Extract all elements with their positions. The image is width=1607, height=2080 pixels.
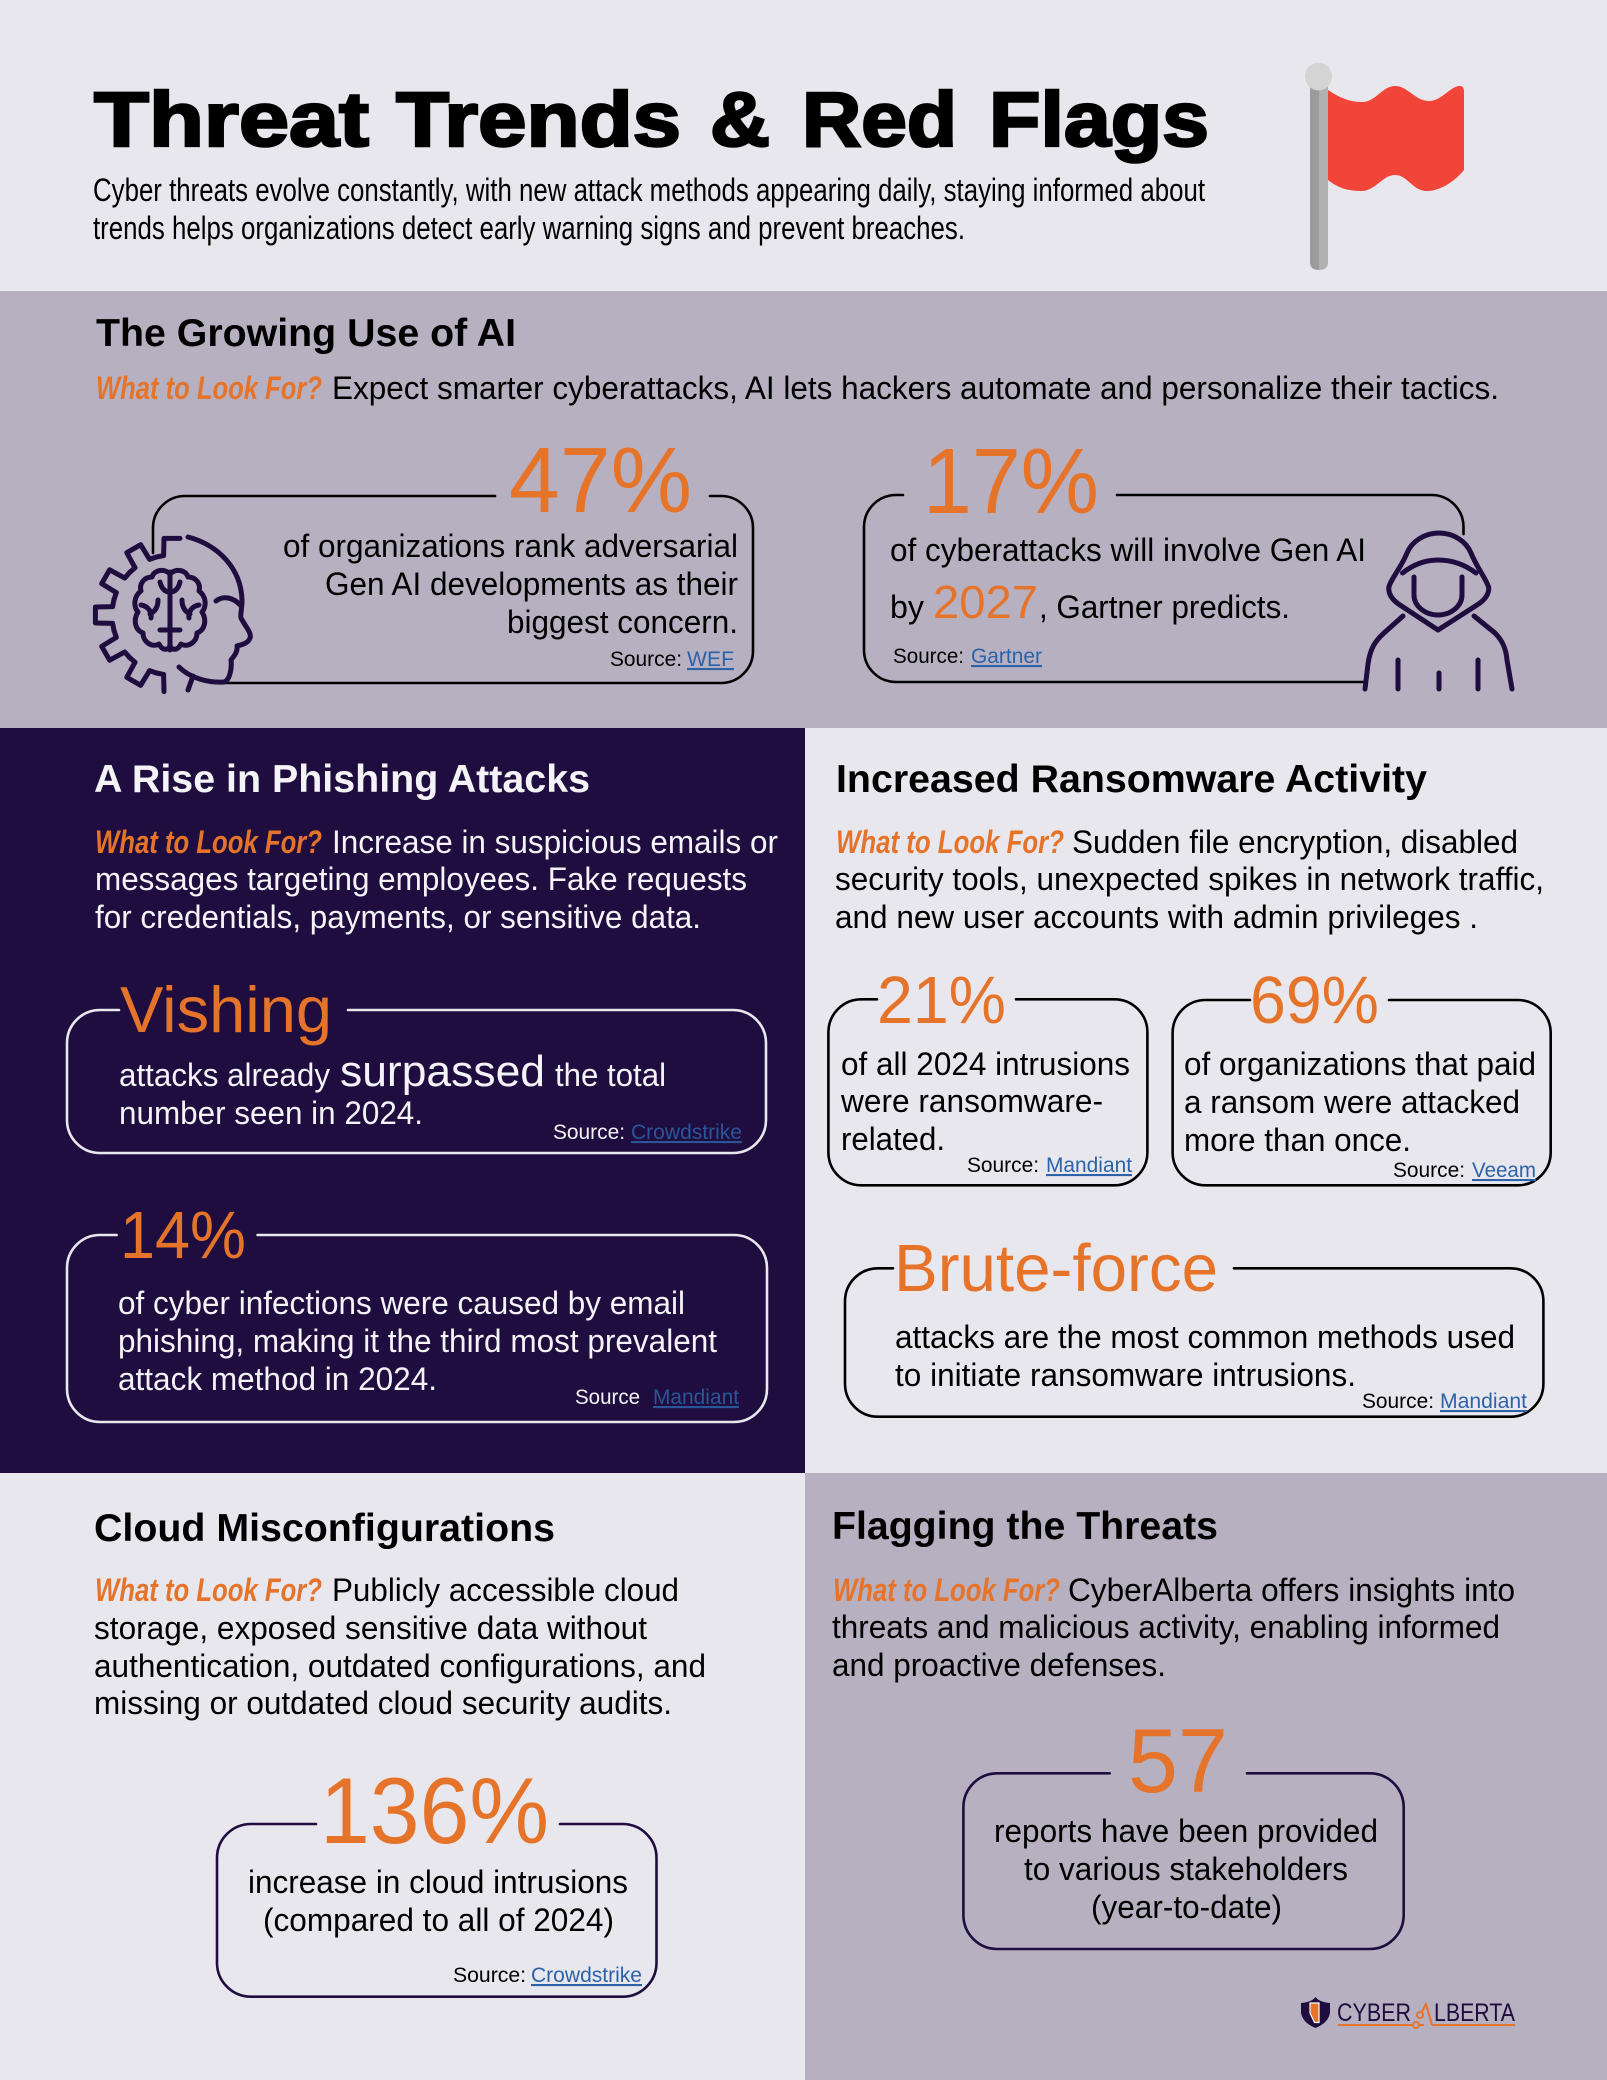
callout: 14%: [67, 1198, 767, 1422]
callout: brute-force: Source:: [1362, 1390, 1434, 1413]
callout: 17%: by: [890, 589, 924, 625]
what to look for: [95, 824, 778, 935]
what to look for: What to Look For?: [833, 1572, 1060, 1608]
callout: vishing: [67, 973, 766, 1153]
logo: CyberAlberta: LBERTA: [1434, 1999, 1515, 2027]
callout: 69%: Veeam: [1472, 1159, 1536, 1182]
callout: vishing: number seen in 2024.: [119, 1095, 423, 1131]
intro text: [93, 172, 1205, 246]
callout: 14%: 14%: [120, 1198, 246, 1273]
callout: 21%: of all 2024 intrusions: [841, 1046, 1130, 1082]
what to look for: and new user accounts with admin privileges .: [835, 899, 1478, 935]
callout: 21%: 21%: [877, 963, 1006, 1038]
icon: red flag: [1305, 62, 1464, 270]
callout: 47%: of organizations rank adversarial: [283, 528, 738, 564]
title: Red: [802, 77, 957, 163]
callout: 47%: Gen AI developments as their: [325, 566, 738, 602]
callout: 47%: [153, 428, 753, 683]
callout: 57: 57: [1128, 1711, 1228, 1812]
what to look for: [832, 1572, 1515, 1683]
callout: 17%: of cyberattacks will involve Gen AI: [890, 532, 1366, 568]
what to look for: [94, 1572, 706, 1721]
heading: A Rise in Phishing Attacks: [94, 758, 590, 801]
heading: Cloud Misconfigurations: [94, 1507, 555, 1550]
callout: brute-force: to initiate ransomware intrusions.: [895, 1357, 1356, 1393]
heading: The Growing Use of AI: [96, 312, 516, 355]
callout: 21%: were ransomware-: [840, 1083, 1103, 1119]
panel: cloud misconfigurations: [0, 1473, 805, 2080]
callout: 17%: [864, 429, 1464, 682]
callout: 69%: more than once.: [1184, 1122, 1411, 1158]
panel: increased ransomware activity: [805, 728, 1607, 1473]
panel: flagging the threats: [805, 1473, 1607, 2080]
title: [94, 77, 1209, 163]
callout: vishing: attacks already: [119, 1057, 330, 1093]
callout: vishing: Source:: [553, 1121, 625, 1144]
heading: Flagging the Threats: [832, 1505, 1218, 1548]
intro text: trends helps organizations detect early warning signs and prevent breaches.: [93, 210, 965, 246]
callout: 57: [963, 1711, 1404, 1949]
panel: header: [0, 0, 1607, 291]
panel: a rise in phishing attacks: [0, 728, 805, 1473]
what to look for: threats and malicious activity, enabling informed: [832, 1609, 1500, 1645]
callout: 21%: [828, 963, 1147, 1185]
what to look for: Sudden file encryption, disabled: [1072, 824, 1518, 860]
callout: 47%: WEF: [687, 648, 734, 671]
icon: gear and brain head: [95, 537, 250, 692]
callout: 136%: [217, 1758, 656, 1997]
panel: the growing use of AI: [0, 291, 1607, 728]
callout: brute-force: attacks are the most common methods used: [895, 1319, 1515, 1355]
what to look for: storage, exposed sensitive data without: [94, 1610, 647, 1646]
callout: 69%: of organizations that paid: [1184, 1046, 1536, 1082]
callout: brute-force: Brute-force: [894, 1231, 1218, 1306]
callout: 69%: 69%: [1250, 963, 1379, 1038]
what to look for: authentication, outdated configurations, and: [94, 1648, 706, 1684]
callout: 69%: [1173, 963, 1551, 1185]
what to look for: What to Look For?: [96, 370, 322, 406]
callout: 14%: Mandiant: [653, 1386, 739, 1409]
callout: vishing: surpassed: [340, 1047, 545, 1096]
what to look for: missing or outdated cloud security audits.: [94, 1685, 672, 1721]
callout: 14%: attack method in 2024.: [118, 1361, 437, 1397]
callout: 21%: Source:: [967, 1154, 1039, 1177]
callout: brute-force: Mandiant: [1440, 1390, 1527, 1413]
what to look for: What to Look For?: [95, 1572, 322, 1608]
callout: 17%: Source:: [893, 645, 964, 668]
title: Trends: [396, 77, 681, 163]
callout: 17%: 2027: [933, 576, 1038, 628]
callout: 69%: a ransom were attacked: [1184, 1084, 1520, 1120]
what to look for: and proactive defenses.: [832, 1647, 1166, 1683]
callout: 17%: 17%: [923, 429, 1099, 533]
icon: hooded hacker: [1365, 533, 1512, 689]
logo: CyberAlberta: [1301, 1997, 1515, 2028]
what to look for: Publicly accessible cloud: [332, 1572, 679, 1608]
what to look for: Increase in suspicious emails or: [332, 824, 778, 860]
callout: 14%: phishing, making it the third most prevalent: [118, 1323, 717, 1359]
heading: Increased Ransomware Activity: [836, 758, 1427, 801]
callout: brute-force: [845, 1231, 1543, 1417]
what to look for: messages targeting employees. Fake requests: [95, 861, 747, 897]
callout: 21%: Mandiant: [1046, 1154, 1132, 1177]
callout: 69%: Source:: [1393, 1159, 1465, 1182]
callout: vishing: the total: [555, 1057, 666, 1093]
callout: vishing: Crowdstrike: [631, 1121, 742, 1144]
callout: 14%: Source: [575, 1386, 640, 1409]
callout: 57: reports have been provided: [994, 1813, 1378, 1849]
callout: 57: (year-to-date): [1091, 1889, 1282, 1925]
callout: 136%: Crowdstrike: [531, 1964, 642, 1987]
what to look for: What to Look For?: [836, 824, 1064, 860]
callout: 136%: increase in cloud intrusions: [248, 1864, 628, 1900]
what to look for: What to Look For?: [95, 824, 322, 860]
callout: 136%: (compared to all of 2024): [263, 1902, 614, 1938]
title: Threat: [94, 77, 369, 163]
logo: CyberAlberta: CYBER: [1337, 1999, 1411, 2027]
callout: 47%: biggest concern.: [507, 604, 738, 640]
title: &: [710, 77, 770, 163]
callout: 17%: Gartner: [971, 645, 1042, 668]
callout: 136%: 136%: [320, 1758, 549, 1863]
callout: 17%: , Gartner predicts.: [1039, 589, 1290, 625]
callout: 47%: 47%: [509, 428, 692, 532]
what to look for: for credentials, payments, or sensitive data.: [95, 899, 701, 935]
what to look for: [835, 824, 1544, 935]
what to look for: security tools, unexpected spikes in network traffic,: [835, 861, 1544, 897]
callout: 57: to various stakeholders: [1024, 1851, 1348, 1887]
intro text: Cyber threats evolve constantly, with new attack methods appearing daily, staying informed about: [93, 172, 1205, 208]
callout: 136%: Source:: [453, 1964, 526, 1987]
what to look for: CyberAlberta offers insights into: [1068, 1572, 1515, 1608]
title: Flags: [989, 77, 1209, 163]
callout: 14%: of cyber infections were caused by email: [118, 1285, 685, 1321]
what to look for: Expect smarter cyberattacks, AI lets hackers automate and personalize their tactics.: [332, 370, 1499, 406]
callout: 21%: related.: [841, 1121, 945, 1157]
callout: 47%: Source:: [610, 648, 682, 671]
callout: vishing: Vishing: [120, 973, 332, 1046]
